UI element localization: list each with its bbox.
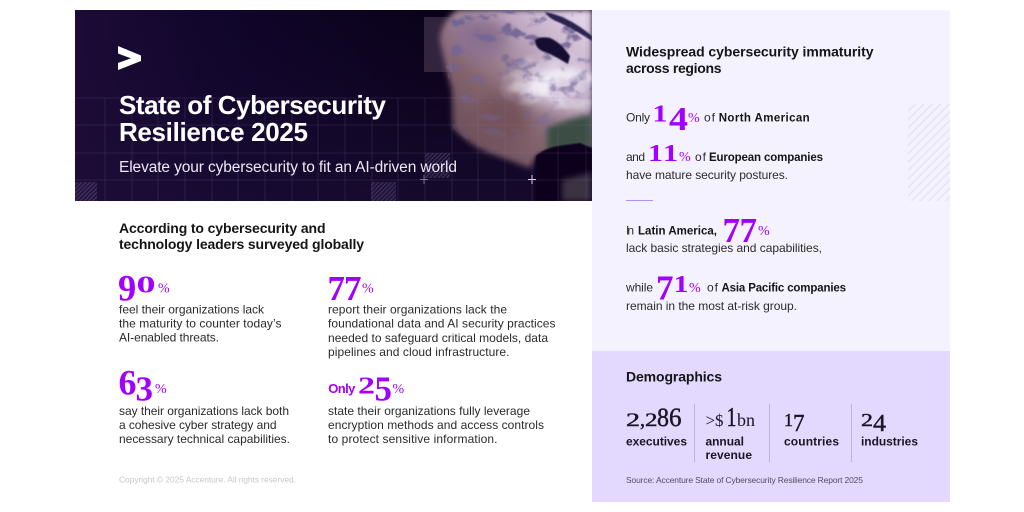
latin america and asia pacific statement: lack basic strategies and capabilities, bbox=[626, 241, 822, 255]
stat: only 25 percent: 5 bbox=[374, 370, 392, 409]
stat: 77 percent: 7 bbox=[344, 269, 362, 308]
stat: 63 percent: 6 bbox=[118, 362, 136, 402]
stat: 77 percent: report their organizations lack the bbox=[328, 302, 507, 316]
stat: only 25 percent: % bbox=[392, 382, 404, 397]
north america and europe statement: 1 bbox=[663, 141, 678, 167]
stat: 90 percent: 9 bbox=[118, 268, 136, 309]
stat: only 25 percent bbox=[328, 370, 544, 446]
stat: industries: 4 bbox=[873, 411, 886, 437]
title: State of Cybersecurity bbox=[119, 90, 387, 120]
plus markers bbox=[420, 175, 536, 184]
stat: industries: 2 bbox=[861, 410, 873, 430]
latin america and asia pacific statement: 1 bbox=[674, 272, 688, 298]
stat: 77 percent: needed to safeguard critical models, data bbox=[328, 331, 548, 345]
panel: demographics bbox=[592, 351, 950, 502]
stat: executives: 8 bbox=[657, 403, 669, 432]
stat: 77 percent: foundational data and AI security practices bbox=[328, 316, 556, 330]
panel: global findings heading: According to cybersecurity and bbox=[119, 220, 326, 236]
subtitle: Elevate your cybersecurity to fit an AI-driven world bbox=[119, 159, 457, 176]
panel: regions bbox=[592, 10, 950, 351]
north america and europe statement: and bbox=[626, 150, 645, 164]
stat: annual revenue: > bbox=[706, 411, 715, 430]
stat: 90 percent: % bbox=[158, 282, 170, 297]
stat: countries: 7 bbox=[793, 411, 804, 437]
divider line bbox=[626, 200, 653, 201]
latin america and asia pacific statement: % bbox=[758, 224, 770, 239]
latin america and asia pacific statement: Latin America, bbox=[638, 226, 717, 238]
dividers bbox=[694, 404, 852, 462]
stat: countries: 1 bbox=[784, 410, 793, 430]
source note: Source: Accenture State of Cybersecurity Resilience Report 2025 bbox=[626, 475, 863, 485]
stat: annual revenue: annual bbox=[706, 435, 744, 449]
stat: only 25 percent: 2 bbox=[358, 373, 375, 399]
dark land and lakes bbox=[535, 12, 592, 64]
stat: 63 percent: a cohesive cyber strategy and bbox=[119, 418, 276, 432]
latin america and asia pacific statement: 7 bbox=[656, 268, 674, 308]
stat: annual revenue: $ bbox=[715, 411, 724, 430]
hatch pattern bbox=[908, 104, 950, 201]
title bbox=[119, 90, 387, 147]
latin america and asia pacific statement: In bbox=[626, 224, 634, 238]
hatched squares bbox=[75, 153, 450, 201]
stat: 77 percent: % bbox=[362, 282, 374, 296]
latin america and asia pacific statement: 7 bbox=[740, 211, 757, 250]
stat: only 25 percent: state their organizations fully leverage bbox=[328, 404, 530, 418]
stat: 90 percent bbox=[118, 268, 282, 344]
panel: global findings heading bbox=[119, 220, 364, 252]
stat: executives: 2 bbox=[645, 410, 658, 431]
globe image bbox=[424, 10, 592, 201]
latin america and asia pacific statement: % bbox=[689, 281, 701, 296]
stat: 90 percent: the maturity to counter today’s bbox=[119, 316, 282, 330]
stat: only 25 percent: to protect sensitive information. bbox=[328, 432, 498, 446]
grid lines bbox=[75, 10, 592, 201]
latin america and asia pacific statement: of bbox=[707, 281, 719, 295]
north america and europe statement: % bbox=[679, 150, 691, 165]
north america and europe statement: European companies bbox=[709, 152, 823, 164]
latin america and asia pacific statement: Asia Pacific companies bbox=[722, 283, 846, 295]
north america and europe statement: % bbox=[688, 111, 700, 126]
stat: 77 percent: pipelines and cloud infrastructure. bbox=[328, 345, 510, 359]
stat: executives: 2 bbox=[626, 410, 640, 431]
stat: industries: industries bbox=[861, 435, 918, 449]
stat: only 25 percent: Only bbox=[328, 381, 356, 396]
stat: annual revenue: 1 bbox=[726, 402, 736, 432]
hero banner bbox=[75, 10, 592, 201]
stat: 90 percent: feel their organizations lack bbox=[119, 302, 265, 316]
stat: 63 percent: necessary technical capabilities. bbox=[119, 432, 290, 446]
stat: only 25 percent: encryption methods and access controls bbox=[328, 418, 544, 432]
latin america and asia pacific statement bbox=[625, 211, 846, 313]
stat: 90 percent: 0 bbox=[136, 273, 156, 299]
stat: executives: , bbox=[640, 409, 645, 431]
stat: countries: countries bbox=[784, 435, 839, 449]
north america and europe statement: 1 bbox=[652, 102, 668, 128]
stat: countries bbox=[784, 410, 839, 449]
demographics heading: Demographics bbox=[626, 369, 722, 385]
stat: annual revenue: bn bbox=[737, 410, 755, 430]
stat: annual revenue bbox=[706, 402, 755, 462]
latin america and asia pacific statement: remain in the most at-risk group. bbox=[626, 299, 797, 313]
title: Resilience 2025 bbox=[119, 117, 308, 147]
regions heading bbox=[626, 44, 874, 76]
latin america and asia pacific statement: while bbox=[625, 281, 653, 295]
regions heading: Widespread cybersecurity immaturity bbox=[626, 44, 874, 60]
stat: industries bbox=[861, 410, 918, 449]
stat: executives: 6 bbox=[669, 403, 682, 432]
copyright: Copyright © 2025 Accenture. All rights reserved. bbox=[119, 475, 296, 485]
north america and europe statement: of bbox=[704, 111, 716, 125]
north america and europe statement: of bbox=[695, 150, 707, 164]
stat: annual revenue: revenue bbox=[706, 448, 752, 462]
stat: executives: executives bbox=[626, 435, 687, 449]
north america and europe statement: 4 bbox=[669, 101, 688, 138]
stat: 77 percent bbox=[328, 269, 556, 359]
north america and europe statement: Only bbox=[626, 111, 650, 125]
stat: 63 percent bbox=[118, 362, 290, 446]
north america and europe statement bbox=[626, 101, 823, 182]
north america and europe statement: 1 bbox=[648, 141, 663, 167]
stat: 77 percent: 7 bbox=[328, 269, 345, 308]
stat: 90 percent: AI-enabled threats. bbox=[119, 330, 219, 344]
north america and europe statement: North American bbox=[719, 113, 810, 125]
icon: accenture chevron logo bbox=[118, 46, 141, 70]
stat: 63 percent: 3 bbox=[136, 370, 153, 409]
regions heading: across regions bbox=[626, 60, 722, 76]
stat: 63 percent: % bbox=[155, 382, 167, 397]
stat: 63 percent: say their organizations lack both bbox=[119, 404, 289, 418]
north america and europe statement: have mature security postures. bbox=[626, 168, 788, 182]
stat: executives bbox=[626, 403, 687, 449]
panel: global findings heading: technology leaders surveyed globally bbox=[119, 236, 364, 252]
latin america and asia pacific statement: 7 bbox=[722, 211, 740, 250]
